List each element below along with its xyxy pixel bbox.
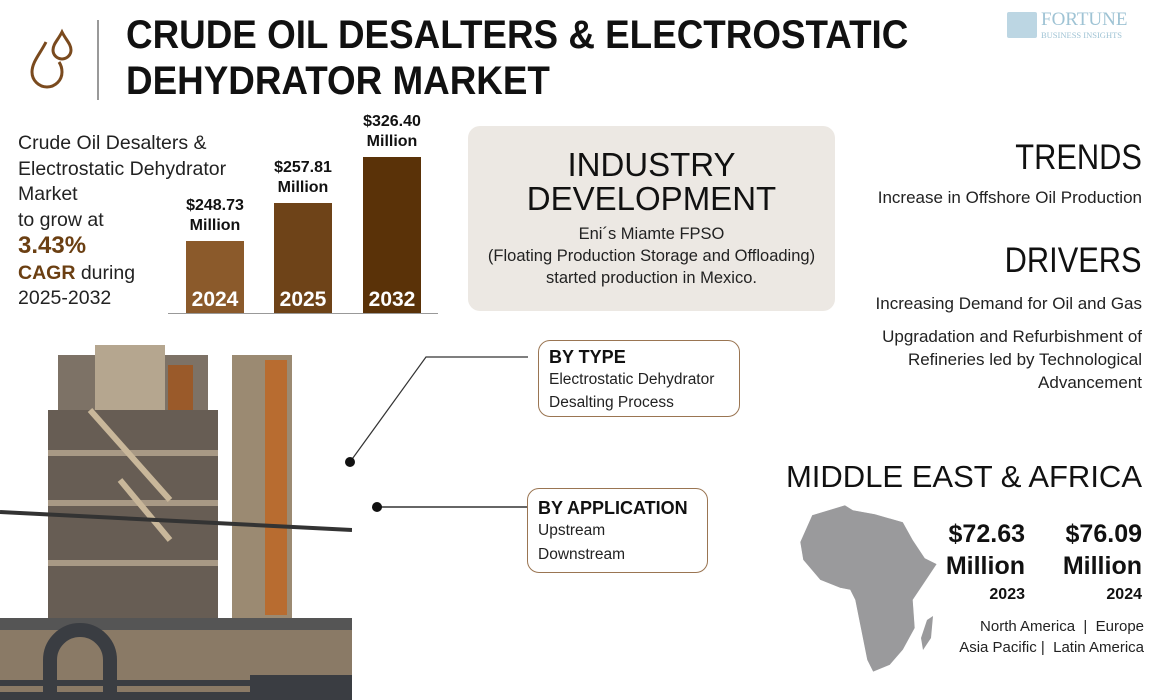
bar chart: 2032 xyxy=(369,288,415,311)
bar chart: $257.81 xyxy=(274,159,332,176)
title xyxy=(126,13,908,103)
map: africa xyxy=(800,505,936,672)
logo: FORTUNE xyxy=(1041,9,1127,30)
text: drivers: Refineries led by Technological xyxy=(908,350,1142,369)
bar chart: 2025 xyxy=(280,288,326,311)
panel: industry development: (Floating Production Storage and Offloading) xyxy=(488,247,815,265)
bar chart: Million xyxy=(278,179,328,196)
heading: drivers: DRIVERS xyxy=(1005,241,1142,280)
heading: middle east & africa: MIDDLE EAST & AFRICA xyxy=(786,459,1142,494)
box: by type xyxy=(538,340,740,417)
bar chart: Million xyxy=(367,133,417,150)
bar chart: Million xyxy=(190,217,240,234)
text: drivers xyxy=(876,294,1142,392)
box: by application: BY APPLICATION xyxy=(538,498,688,518)
bar chart: $248.73 xyxy=(186,197,244,214)
bar chart: $326.40 xyxy=(363,113,421,130)
stat: 2024: 2024 xyxy=(1106,586,1142,603)
box: by type: Desalting Process xyxy=(549,394,674,411)
bar chart xyxy=(168,113,438,314)
stat: 2024: $76.09 xyxy=(1066,520,1142,548)
stat: 2024: Million xyxy=(1063,552,1142,580)
image: refinery xyxy=(0,345,352,700)
text: drivers: Increasing Demand for Oil and Gas Upgradation and Refurbishment of xyxy=(876,294,1142,346)
title: DEHYDRATOR MARKET xyxy=(126,59,550,103)
text: other regions xyxy=(959,618,1144,656)
text: trends: Increase in Offshore Oil Production xyxy=(878,188,1142,207)
text block: market growth: 2025-2032 xyxy=(18,287,111,309)
stat: 2023: Million xyxy=(946,552,1025,580)
connector: by type xyxy=(345,356,528,512)
box: by application: Upstream xyxy=(538,522,605,539)
panel: industry development: DEVELOPMENT xyxy=(527,180,776,217)
icon: oil drops xyxy=(30,28,72,88)
box: by application: Downstream xyxy=(538,546,625,563)
stat: 2023: 2023 xyxy=(989,586,1025,603)
divider xyxy=(97,20,99,100)
box: by type: Electrostatic Dehydrator xyxy=(549,371,714,388)
bar chart: 2024 xyxy=(192,288,238,311)
text: drivers: Advancement xyxy=(1038,373,1142,392)
logo xyxy=(1007,9,1127,40)
text: other regions: North America | Europe xyxy=(980,618,1144,635)
text block: market growth: Crude Oil Desalters & xyxy=(18,132,207,154)
panel: industry development: Eni´s Miamte FPSO xyxy=(579,225,724,243)
text block: market growth xyxy=(18,132,226,309)
panel: industry development xyxy=(468,126,835,311)
text block: market growth: Electrostatic Dehydrator xyxy=(18,158,226,180)
box: by application xyxy=(527,488,708,573)
text block: market growth: CAGR during xyxy=(18,262,135,284)
text block: market growth: to grow at xyxy=(18,208,104,230)
panel: industry development: INDUSTRY xyxy=(567,146,736,183)
heading: trends: TRENDS xyxy=(1015,138,1142,177)
stat: 2023 xyxy=(946,520,1025,603)
stat: 2023: $72.63 xyxy=(949,520,1025,548)
title: CRUDE OIL DESALTERS & ELECTROSTATIC xyxy=(126,13,908,57)
text: other regions: Asia Pacific | Latin America xyxy=(959,639,1144,656)
text block: market growth: 3.43% xyxy=(18,232,86,259)
box: by type: BY TYPE xyxy=(549,347,626,367)
text block: market growth: Market xyxy=(18,183,78,205)
panel: industry development: started production in Mexico. xyxy=(546,269,757,287)
logo: BUSINESS INSIGHTS xyxy=(1041,30,1122,40)
stat: 2024 xyxy=(1063,520,1142,603)
